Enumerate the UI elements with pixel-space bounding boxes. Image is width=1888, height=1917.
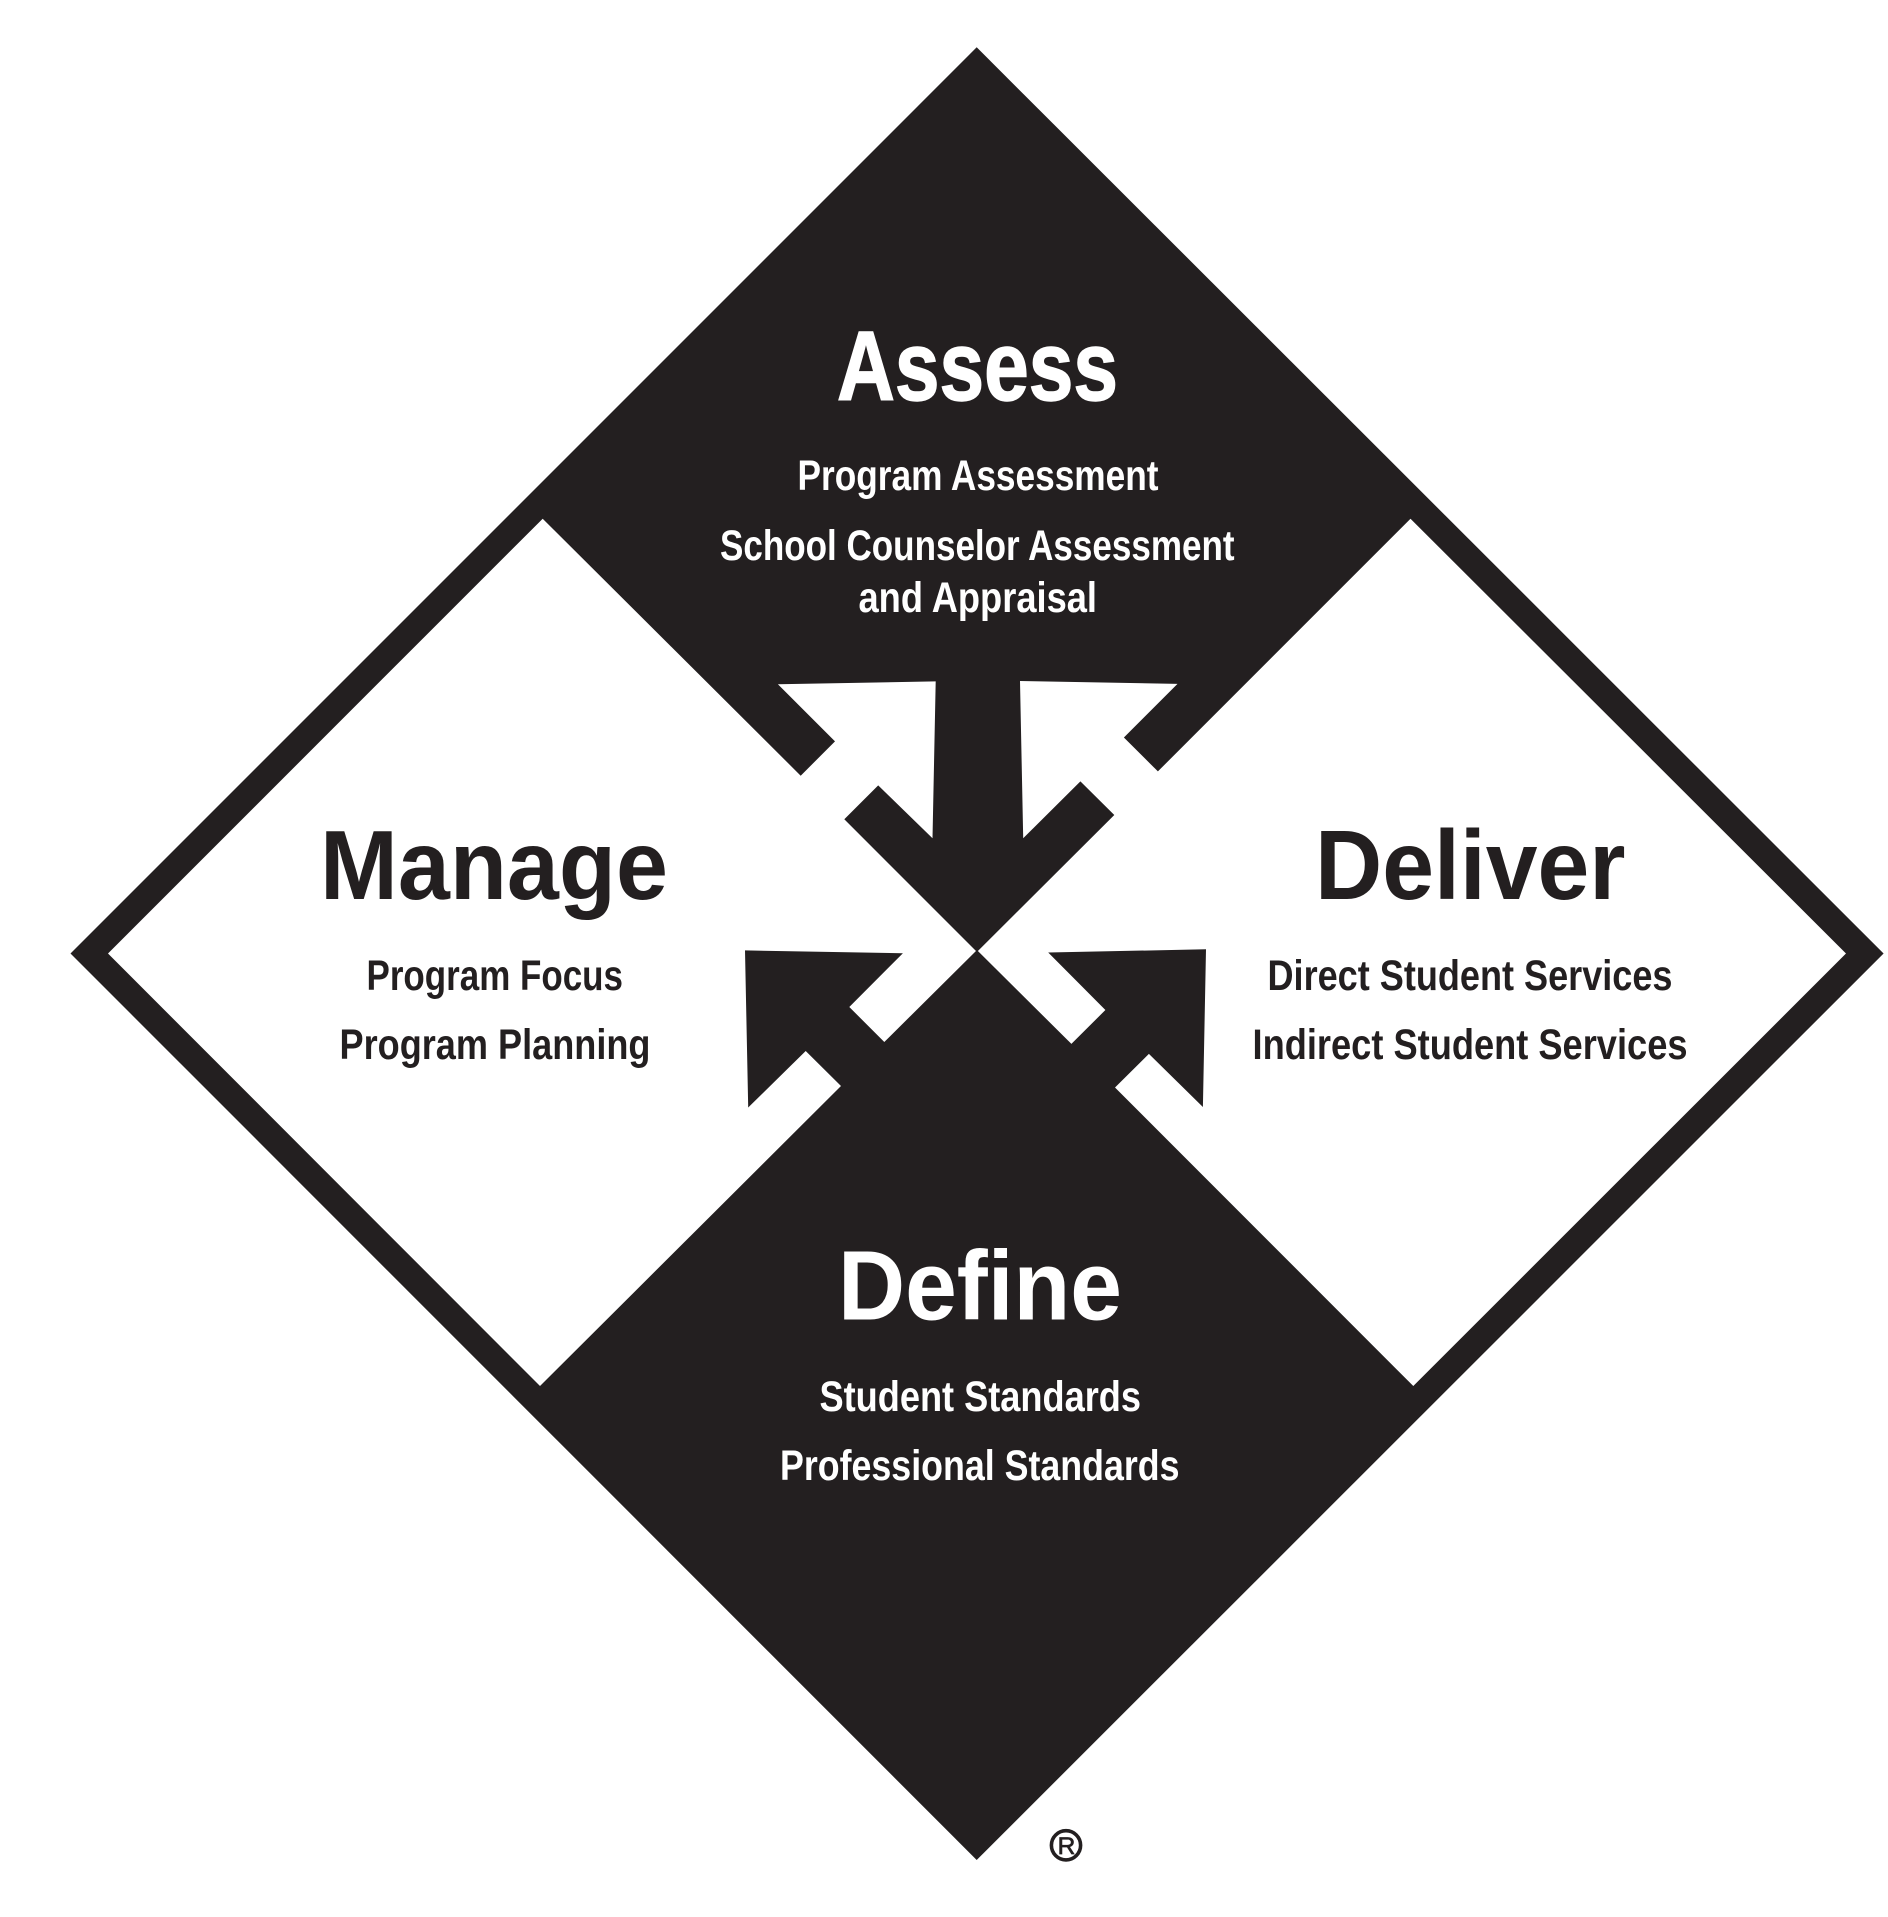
text: Indirect Student Services: Indirect Student Services [1252, 1022, 1688, 1069]
section: Define [780, 1230, 1180, 1490]
heading: Assess: Assess [837, 311, 1118, 421]
text: Professional Standards: Professional Standards [780, 1443, 1180, 1490]
text: and Appraisal: and Appraisal [858, 575, 1097, 622]
icon: registered trademark [1051, 1831, 1081, 1860]
heading: Manage: Manage [320, 810, 668, 920]
section: Assess [720, 311, 1234, 622]
section: Manage [320, 810, 668, 1069]
panel: Manage white region with arrows [108, 519, 976, 1386]
text: Direct Student Services: Direct Student Services [1268, 953, 1672, 1000]
section: Deliver [1252, 810, 1688, 1069]
heading: Deliver: Deliver [1315, 810, 1626, 920]
text: Program Assessment: Program Assessment [798, 453, 1158, 500]
text: Student Standards: Student Standards [820, 1374, 1141, 1421]
text: Program Planning: Program Planning [340, 1022, 650, 1069]
heading: Define: Define [838, 1230, 1122, 1340]
icon: registered trademark: R [1058, 1833, 1075, 1860]
text: Program Focus: Program Focus [366, 953, 623, 1000]
text: School Counselor Assessment: School Counselor Assessment [720, 523, 1234, 570]
panel: Deliver white region with arrows [978, 519, 1846, 1386]
